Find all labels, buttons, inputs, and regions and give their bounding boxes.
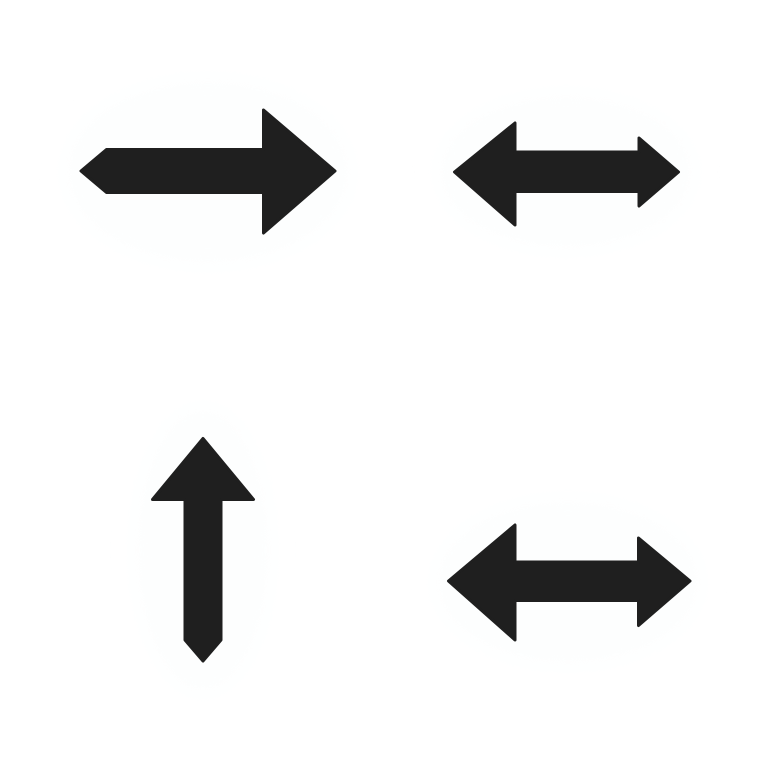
arrow: double horizontal top [454,123,678,225]
arrow: up [152,438,254,661]
arrow: double horizontal bottom [448,525,690,640]
arrow: right [81,110,335,233]
